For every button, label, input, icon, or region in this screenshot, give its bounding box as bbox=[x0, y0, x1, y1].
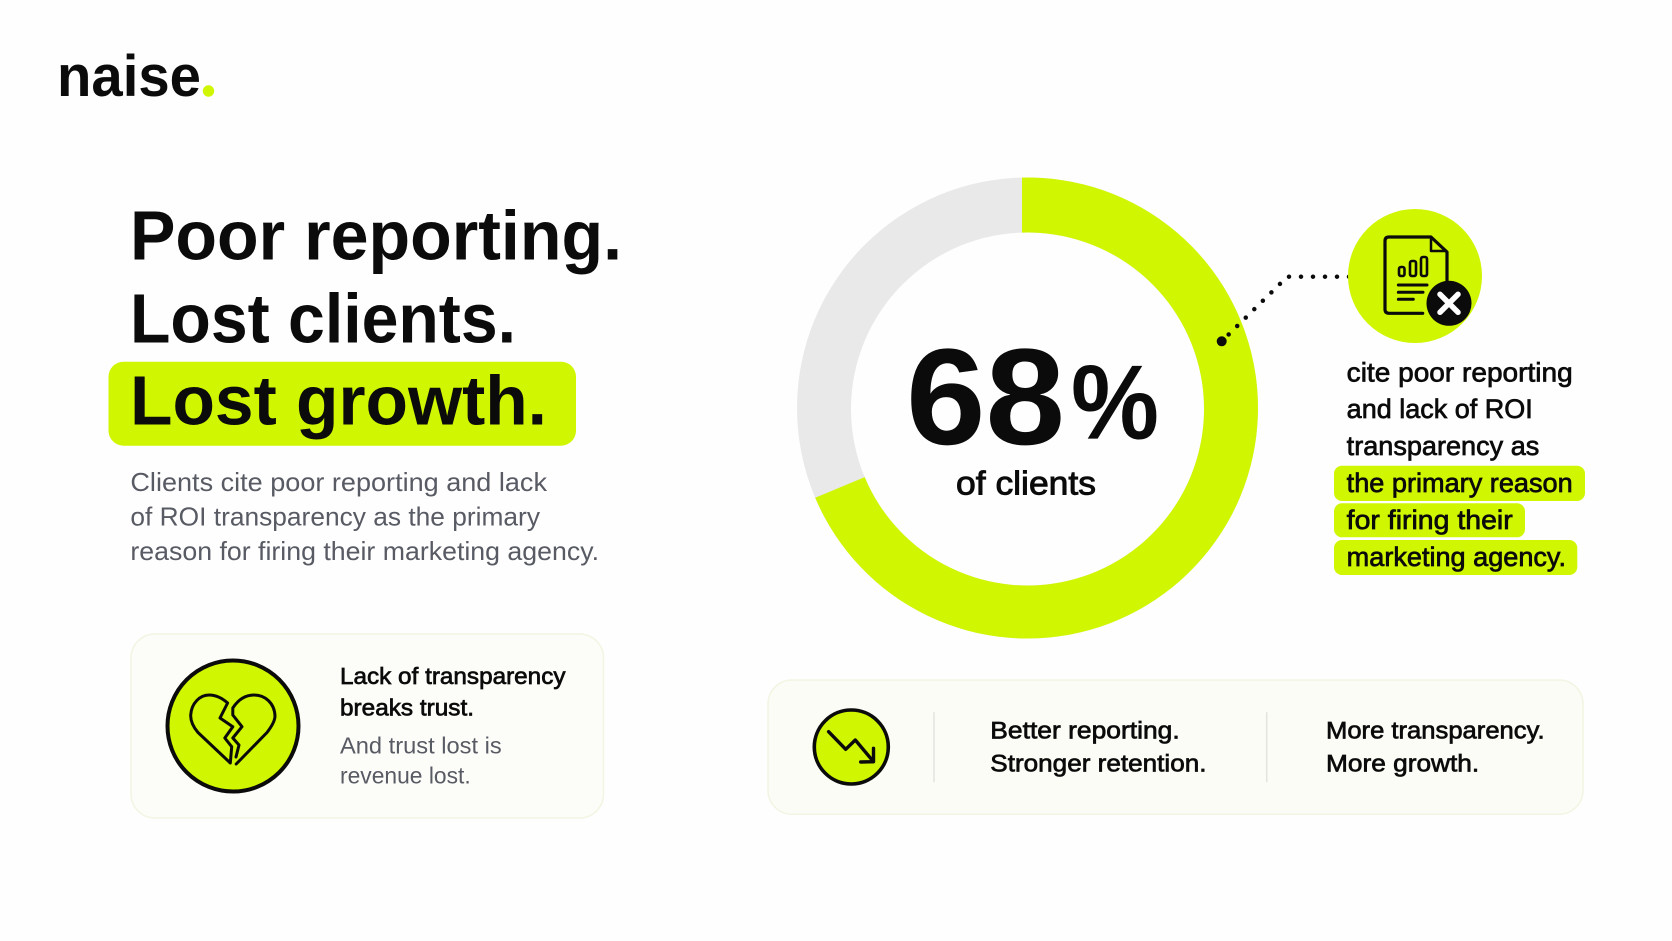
text block: subtitle: Clients cite poor reporting and lack bbox=[130, 467, 548, 497]
stat label: of clients bbox=[956, 464, 1096, 502]
text block: callout description bbox=[1334, 358, 1585, 575]
stat: 68%: % bbox=[1071, 344, 1159, 462]
text block: subtitle: of ROI transparency as the primary bbox=[130, 502, 540, 532]
card body text bbox=[340, 732, 502, 788]
stat: 68% bbox=[906, 321, 1159, 474]
card heading bbox=[340, 663, 566, 720]
chart: 68% donut bbox=[797, 178, 1258, 639]
stat: 68%: 68 bbox=[906, 321, 1065, 474]
text block: callout description: marketing agency. bbox=[1347, 542, 1566, 572]
text block: callout description: for firing their bbox=[1347, 505, 1513, 535]
text block: callout description: cite poor reporting bbox=[1347, 358, 1573, 388]
text block: subtitle bbox=[130, 467, 599, 566]
card body text: revenue lost. bbox=[340, 762, 471, 788]
card body text: And trust lost is bbox=[340, 732, 502, 758]
card heading: breaks trust. bbox=[340, 694, 474, 720]
title bbox=[108, 196, 622, 446]
logo: naise: naise bbox=[57, 44, 201, 109]
title: Lost clients. bbox=[130, 280, 516, 358]
takeaway: better reporting: Stronger retention. bbox=[990, 750, 1206, 777]
text block: callout description: transparency as bbox=[1347, 431, 1539, 461]
title: Lost growth. bbox=[130, 361, 547, 439]
takeaway: better reporting bbox=[990, 717, 1206, 777]
icon: report with x badge bbox=[1348, 209, 1482, 343]
icon: broken heart bbox=[168, 660, 298, 792]
takeaway: more transparency: More growth. bbox=[1326, 750, 1479, 777]
takeaway: better reporting: Better reporting. bbox=[990, 717, 1180, 744]
takeaway: more transparency bbox=[1326, 717, 1545, 777]
text block: subtitle: reason for firing their marketing agency. bbox=[130, 536, 599, 566]
callout connector: dotted line bbox=[1217, 277, 1349, 346]
takeaway: more transparency: More transparency. bbox=[1326, 717, 1545, 744]
title: Poor reporting. bbox=[130, 196, 622, 274]
card heading: Lack of transparency bbox=[340, 663, 566, 689]
panel: takeaways card bbox=[768, 680, 1583, 814]
panel: broken trust card bbox=[131, 634, 604, 818]
text block: callout description: and lack of ROI bbox=[1347, 394, 1533, 424]
icon: downward trend bbox=[814, 710, 888, 784]
text block: callout description: the primary reason bbox=[1347, 468, 1573, 498]
